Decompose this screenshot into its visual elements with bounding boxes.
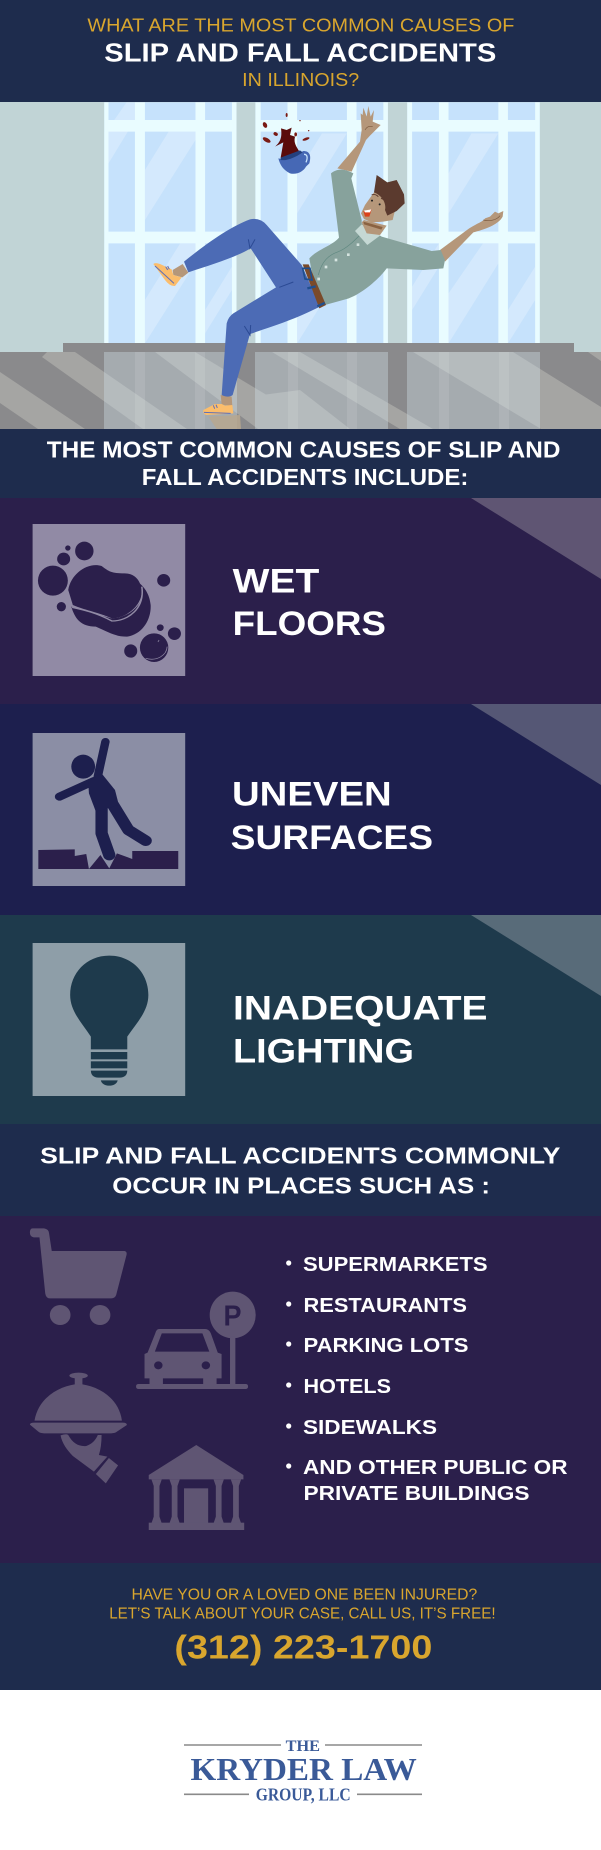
- label: uneven surfaces: SURFACES: [231, 819, 433, 857]
- label: inadequate lighting: INADEQUATE: [233, 989, 488, 1027]
- phone number: (312) 223-1700: [174, 1628, 432, 1665]
- title line 3: IN ILLINOIS?: [242, 70, 359, 90]
- title line 1: WHAT ARE THE MOST COMMON CAUSES OF: [87, 16, 514, 36]
- call to action line 2: LET’S TALK ABOUT YOUR CASE, CALL US, IT’S FREE!: [109, 1605, 496, 1622]
- label: wet floors: WET: [233, 562, 320, 600]
- icon: shopping cart: [30, 1228, 127, 1325]
- hair: [374, 175, 405, 216]
- logo: kryder law: KRYDER LAW: [190, 1751, 417, 1787]
- list of places: RESTAURANTS: [304, 1294, 467, 1317]
- list of places: [286, 1253, 568, 1505]
- label: inadequate lighting: LIGHTING: [233, 1032, 414, 1070]
- subheading: common causes: [0, 429, 601, 498]
- belt: [303, 264, 326, 308]
- collar: [355, 224, 380, 245]
- raised arm: [337, 106, 381, 172]
- subheading line 1: THE MOST COMMON CAUSES OF SLIP AND: [47, 437, 560, 463]
- icon box: sponge and bubbles: [33, 524, 185, 676]
- panel: places: [0, 1216, 601, 1563]
- icon: serving cloche and hand: [30, 1373, 127, 1483]
- splashing coffee cup: [262, 113, 310, 174]
- list of places: SUPERMARKETS: [303, 1253, 488, 1276]
- parking sign letter: P: [224, 1300, 242, 1332]
- panel: wet floors: [0, 498, 601, 704]
- label: uneven surfaces: [231, 775, 433, 857]
- floor: [0, 343, 601, 429]
- window: [104, 102, 540, 343]
- list of places: SIDEWALKS: [303, 1416, 437, 1439]
- footer logo: [0, 1690, 601, 1850]
- call to action line 1: HAVE YOU OR A LOVED ONE BEEN INJURED?: [132, 1586, 478, 1603]
- icon: public building: [149, 1445, 244, 1530]
- subheading line 2: FALL ACCIDENTS INCLUDE:: [142, 464, 468, 490]
- label: wet floors: FLOORS: [233, 605, 386, 643]
- logo: group llc: GROUP, LLC: [256, 1785, 351, 1805]
- subheading: places: [0, 1124, 601, 1216]
- list of places: HOTELS: [304, 1375, 391, 1398]
- icon box: light bulb: [33, 943, 185, 1096]
- extended arm: [440, 211, 503, 262]
- places heading line 1: SLIP AND FALL ACCIDENTS COMMONLY: [40, 1142, 560, 1168]
- list of places: AND OTHER PUBLIC OR: [303, 1456, 568, 1479]
- list of places: PARKING LOTS: [304, 1334, 468, 1357]
- call to action panel: [0, 1563, 601, 1690]
- label: uneven surfaces: UNEVEN: [232, 775, 392, 813]
- label: wet floors: [233, 562, 386, 643]
- panel: inadequate lighting: [0, 915, 601, 1124]
- icon: car and parking sign: [136, 1292, 256, 1389]
- header panel: [0, 0, 601, 102]
- illustration: man slipping by a window: [0, 102, 601, 429]
- shirt: [309, 170, 445, 305]
- panel: uneven surfaces: [0, 704, 601, 915]
- title line 2: SLIP AND FALL ACCIDENTS: [104, 37, 496, 67]
- label: inadequate lighting: [233, 989, 488, 1070]
- face details: [363, 209, 372, 217]
- neck and face: [362, 220, 387, 235]
- list of places: PRIVATE BUILDINGS: [304, 1482, 530, 1505]
- places heading line 2: OCCUR IN PLACES SUCH AS :: [112, 1172, 490, 1198]
- logo: the: THE: [286, 1738, 320, 1755]
- icon box: person falling on broken floor: [33, 733, 185, 886]
- man: legs and shoes: [153, 219, 320, 429]
- man: upper body and coffee cup: [262, 106, 503, 308]
